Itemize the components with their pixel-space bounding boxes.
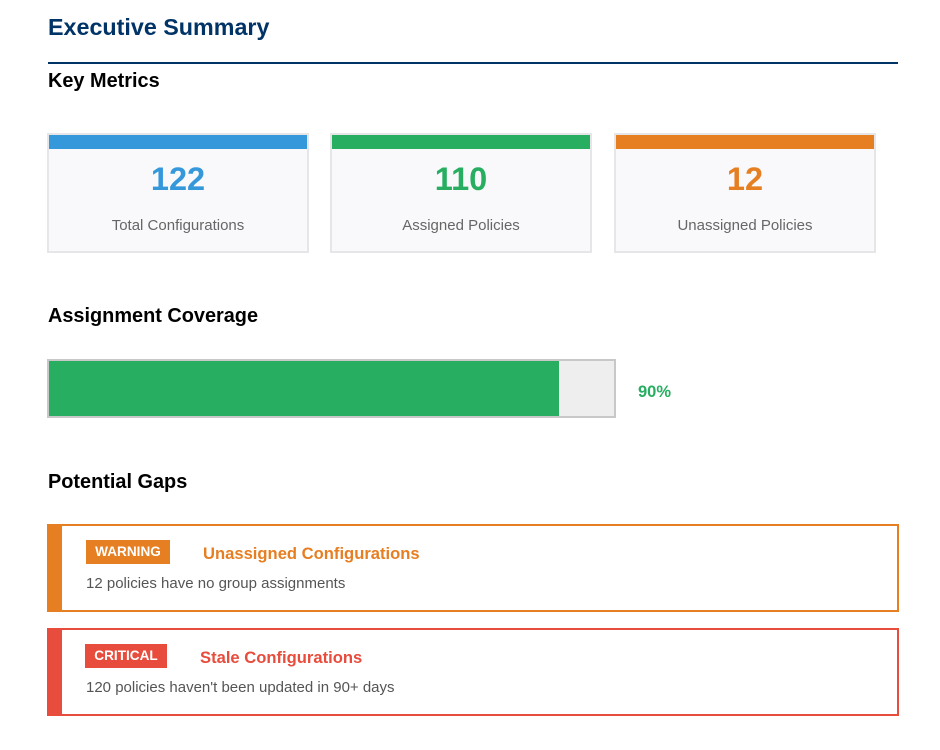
title rule <box>48 62 898 64</box>
gap title: stale configurations: Stale Configurations <box>200 648 362 667</box>
heading: potential gaps: Potential Gaps <box>48 471 187 493</box>
title: Executive Summary <box>48 14 269 40</box>
progress fill <box>49 361 559 416</box>
label: assigned policies: Assigned Policies <box>402 217 520 234</box>
gap description: 12 policies have no group assignments <box>86 575 345 592</box>
badge: critical: CRITICAL <box>94 648 158 663</box>
gap title: unassigned configurations: Unassigned Configurations <box>203 544 420 563</box>
value: 12: 12 <box>727 161 763 197</box>
blue accent bar <box>49 135 307 149</box>
panel: warning gap <box>47 524 899 612</box>
green accent bar <box>332 135 590 149</box>
panel: unassigned policies <box>614 133 876 253</box>
panel: total configurations <box>47 133 309 253</box>
value: 110: 110 <box>435 161 487 197</box>
heading: assignment coverage: Assignment Coverage <box>48 305 258 327</box>
value: 122: 122 <box>151 161 205 197</box>
label: unassigned policies: Unassigned Policies <box>677 217 813 234</box>
badge: warning <box>86 540 170 564</box>
label: total configurations: Total Configurations <box>112 217 244 234</box>
heading: key metrics: Key Metrics <box>48 70 160 92</box>
panel: critical gap <box>47 628 899 716</box>
badge: critical <box>85 644 167 668</box>
orange accent bar <box>616 135 874 149</box>
panel: assigned policies <box>330 133 592 253</box>
badge: warning: WARNING <box>95 544 161 559</box>
gap description: 120 policies haven't been updated in 90+ days <box>86 679 395 696</box>
coverage percentage: 90% <box>638 383 671 401</box>
progress bar: coverage <box>47 359 616 418</box>
